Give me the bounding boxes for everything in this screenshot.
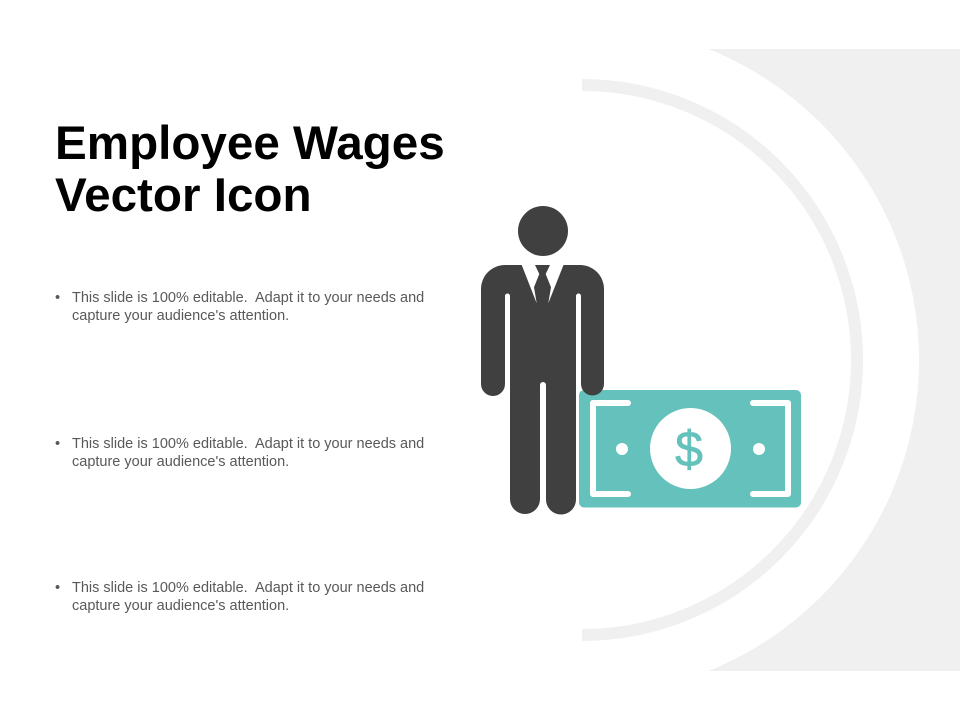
thin grey ring arc xyxy=(582,85,857,635)
title: Employee Wages xyxy=(55,117,445,170)
title: Vector Icon xyxy=(55,169,312,222)
shirt collar xyxy=(522,265,564,303)
bullet text 1: This slide is 100% editable. Adapt it to your needs and capture your audience's attention. xyxy=(72,290,424,324)
bullet text 3: This slide is 100% editable. Adapt it to your needs and capture your audience's attention. xyxy=(72,580,424,614)
icon: banknote xyxy=(579,390,801,508)
bullet text 3: • xyxy=(55,580,60,596)
title xyxy=(55,117,445,222)
head xyxy=(518,206,568,256)
grey background panel with circular cutout xyxy=(245,24,960,696)
bullet text 2: • xyxy=(55,436,60,452)
suit body xyxy=(481,265,604,515)
bullet text 2: This slide is 100% editable. Adapt it to your needs and capture your audience's attention. xyxy=(72,436,424,470)
dollar sign: $ xyxy=(675,421,703,477)
bullet text 1: • xyxy=(55,290,60,306)
icon: businessman xyxy=(481,206,604,515)
